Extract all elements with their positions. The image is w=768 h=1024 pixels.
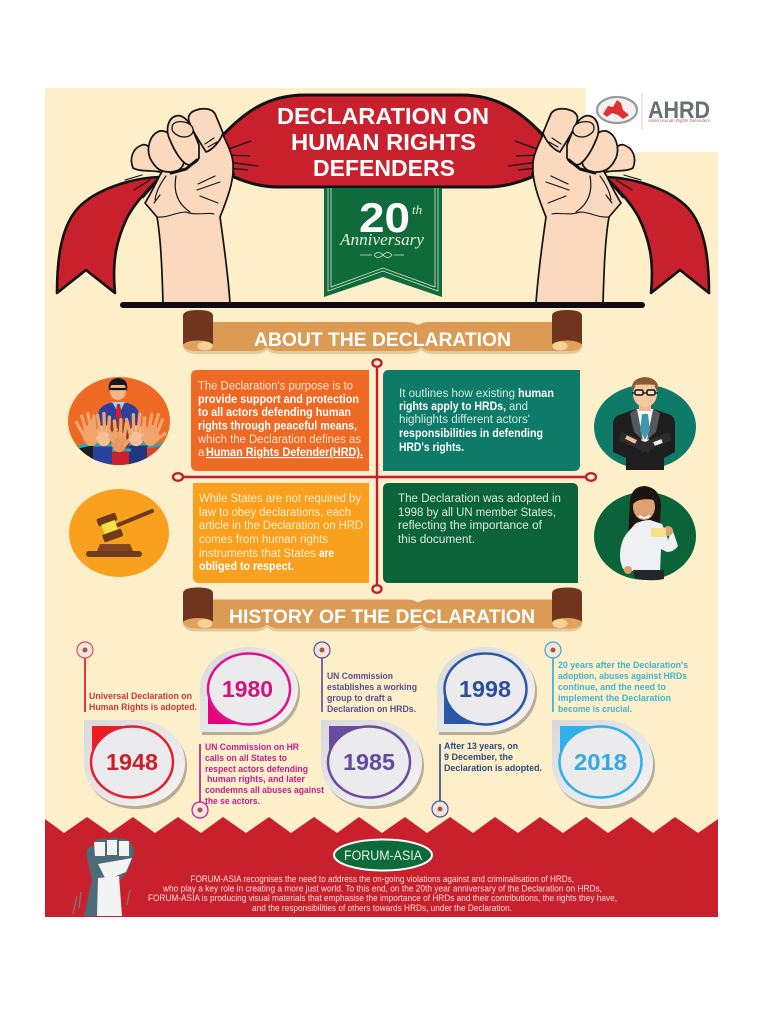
- timeline: 1985: UN Commission: [327, 671, 393, 682]
- panel: obligations: comes from human rights: [199, 534, 328, 546]
- panel: outline: It outlines how existing: [399, 388, 515, 400]
- timeline: 1980: condemns all abuses against: [205, 785, 325, 796]
- badge: 1980: [222, 676, 273, 702]
- icon: raised fist: [73, 838, 134, 916]
- timeline: 1998: Declaration is adopted.: [444, 763, 542, 774]
- timeline: 1948: Universal Declaration on: [89, 691, 192, 702]
- badge: 2018: [574, 749, 627, 775]
- timeline: 1998: [432, 647, 542, 817]
- logo: AHRD: [586, 88, 718, 152]
- timeline: 1985: [314, 642, 424, 809]
- logo: FORUM-ASIA: [334, 840, 432, 870]
- panel: outline: [383, 370, 580, 471]
- timeline: 1980: calls on all States to: [205, 753, 287, 764]
- panel: purpose: [191, 370, 369, 471]
- green anniversary pennant: th: [412, 202, 422, 217]
- stage bar: [120, 302, 645, 308]
- timeline: 1980: the se actors.: [205, 796, 260, 807]
- logo: FORUM-ASIA: FORUM-ASIA: [344, 848, 422, 863]
- panel: purpose: The Declaration's purpose is to: [198, 380, 353, 392]
- timeline: 1980: respect actors defending: [205, 764, 308, 775]
- panel: purpose: to all actors defending human: [198, 407, 351, 419]
- logo: AHRD: Asian Human Rights Defenders: [648, 118, 711, 123]
- panel: obligations: are: [319, 548, 334, 560]
- badge: [437, 647, 537, 735]
- panel: obligations: law to obey declarations, each: [199, 507, 351, 519]
- panel: adoption: [383, 483, 578, 583]
- panel: obligations: While States are not required by: [199, 493, 361, 505]
- section heading: about: ABOUT THE DECLARATION: [254, 329, 511, 351]
- crosshair divider: [173, 359, 596, 593]
- timeline: 2018: adoption, abuses against HRDs: [558, 671, 687, 682]
- infographic canvas: [45, 88, 718, 917]
- timeline: 2018: [545, 642, 691, 809]
- timeline: 1948: Human Rights is adopted.: [89, 702, 197, 713]
- timeline: 1980: human rights, and later: [207, 774, 305, 785]
- green anniversary pennant: Anniversary: [339, 230, 424, 249]
- panel: obligations: instruments that States: [199, 548, 316, 560]
- icon: right fist holding ribbon: [533, 109, 709, 303]
- section heading: history: [183, 588, 582, 632]
- timeline: 1980: UN Commission on HR: [205, 742, 299, 753]
- badge: [200, 647, 300, 735]
- timeline: 2018: 20 years after the Declaration's: [558, 660, 688, 671]
- timeline: 2018: implement the Declaration: [558, 693, 671, 704]
- badge: 1985: [343, 749, 395, 775]
- panel: outline: highlights different actors': [399, 414, 530, 426]
- footer text: FORUM-ASIA recognises the need to address the on-going violations against and criminalisation of HRDs,: [190, 874, 574, 884]
- panel: outline: HRD's rights.: [399, 442, 464, 454]
- panel: adoption: reflecting the importance of: [398, 520, 543, 532]
- panel: adoption: this document.: [398, 534, 475, 546]
- panel: outline: rights apply to HRDs,: [399, 401, 506, 413]
- icon: woman with badge: [594, 486, 696, 580]
- footer text: who play a key role in creating a more just world. To this end, on the 20th year anniversary of the Declaration on HRDs,: [162, 884, 602, 894]
- footer text: and the responsibilities of others towards HRDs, under the Declaration.: [252, 903, 512, 913]
- pin: [314, 642, 330, 712]
- timeline: 1985: Declaration on HRDs.: [327, 704, 416, 715]
- panel: purpose: rights through peaceful means,: [198, 420, 357, 432]
- panel: adoption: 1998 by all UN member States,: [398, 507, 556, 519]
- panel: obligations: obliged to respect.: [199, 561, 294, 573]
- panel: purpose: which the Declaration defines as: [197, 434, 361, 446]
- badge: [552, 720, 655, 809]
- badge: 1948: [106, 749, 158, 775]
- panel: outline: and: [509, 401, 528, 413]
- pin: [192, 744, 208, 818]
- logo: AHRD: AHRD: [648, 97, 710, 124]
- page background panel: [45, 88, 718, 917]
- section heading: about: [183, 310, 582, 354]
- timeline: 1998: After 13 years, on: [444, 741, 518, 752]
- panel: purpose: a: [198, 447, 205, 459]
- timeline: 1998: 9 December, the: [444, 752, 513, 763]
- title text: HUMAN RIGHTS: [291, 129, 476, 155]
- green anniversary pennant: [324, 188, 442, 297]
- panel: obligations: [193, 483, 369, 583]
- footer panel: [45, 817, 718, 917]
- pin: [545, 642, 561, 712]
- icon: gavel: [69, 489, 169, 577]
- footer text: FORUM-ASIA is producing visual materials that emphasise the importance of HRDs and their contributions, the rights they have,: [148, 893, 617, 903]
- title text: DECLARATION ON: [277, 103, 489, 129]
- icon: businessman: [594, 377, 696, 470]
- title text: DEFENDERS: [313, 155, 455, 181]
- panel: obligations: article in the Declaration on HRD: [199, 520, 363, 532]
- timeline: 2018: continue, and the need to: [558, 682, 666, 693]
- section heading: history: HISTORY OF THE DECLARATION: [229, 606, 535, 628]
- timeline: 1948: [77, 642, 197, 809]
- panel: purpose: Human Rights Defender(HRD).: [206, 447, 363, 459]
- panel: purpose: provide support and protection: [198, 394, 359, 406]
- timeline: 1985: group to draft a: [327, 693, 393, 704]
- badge: [84, 720, 187, 809]
- pin: [432, 744, 448, 817]
- icon: left fist holding ribbon: [57, 109, 233, 303]
- icon: speaker and raised hands: [68, 377, 170, 468]
- badge: [321, 720, 424, 809]
- panel: outline: responsibilities in defending: [399, 428, 543, 440]
- timeline: 1980: [192, 647, 327, 818]
- pin: [77, 642, 93, 712]
- panel: outline: human: [518, 388, 554, 400]
- timeline: 2018: become is crucial.: [558, 704, 632, 715]
- anniversary number: 20: [359, 194, 410, 241]
- title sausage banner: [223, 95, 543, 187]
- timeline: 1985: establishes a working: [327, 682, 417, 693]
- panel: adoption: The Declaration was adopted in: [398, 493, 561, 505]
- badge: 1998: [459, 676, 511, 702]
